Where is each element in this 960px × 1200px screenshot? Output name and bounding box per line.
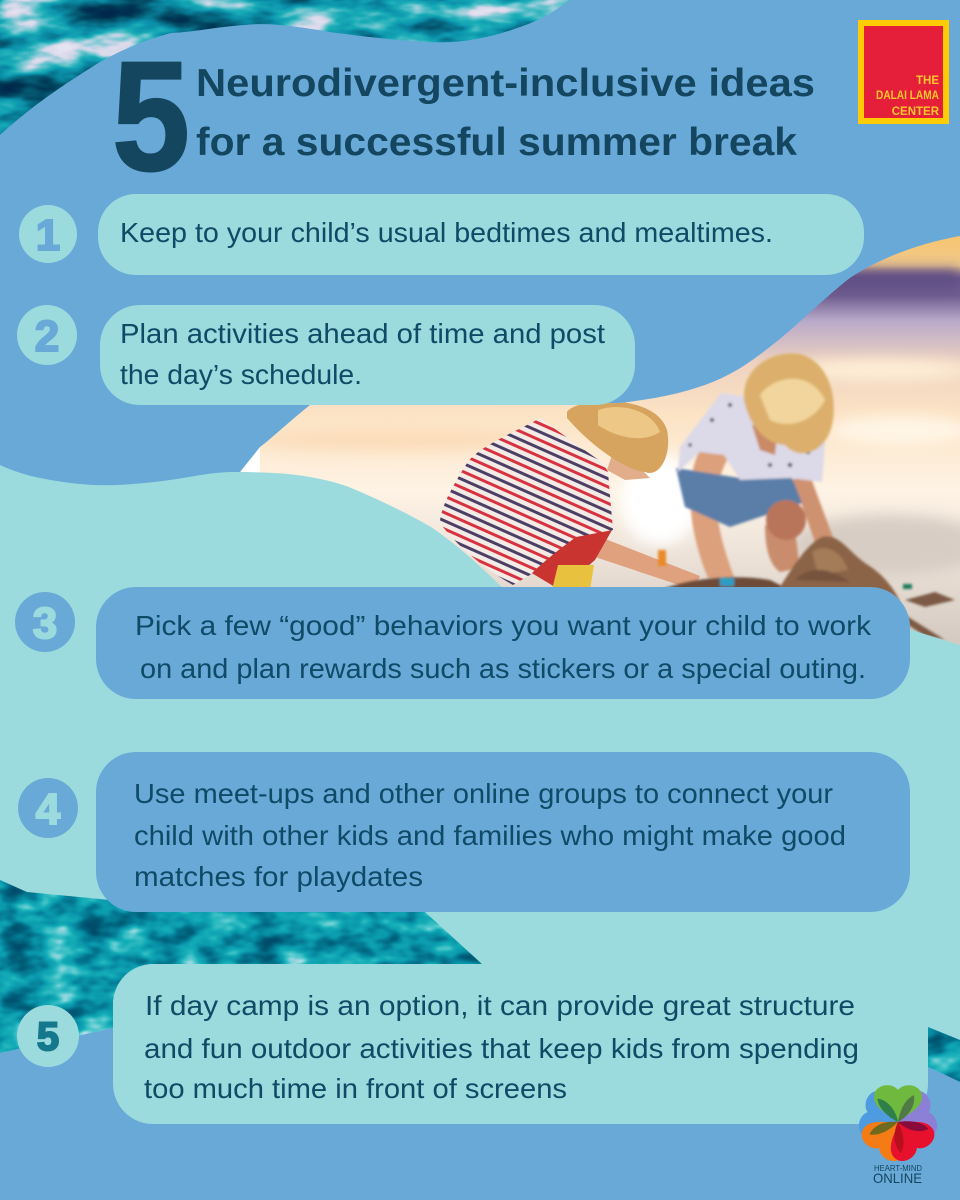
text 2: the day’s schedule. xyxy=(120,359,362,390)
white photo sliver xyxy=(240,447,260,476)
bubble 5 xyxy=(113,964,928,1124)
text 3: Pick a few “good” behaviors you want your child to work xyxy=(135,610,872,641)
teal wave xyxy=(0,465,960,1200)
step 3 xyxy=(15,587,910,699)
step 5 xyxy=(17,964,928,1124)
bubble 3 xyxy=(96,587,910,699)
logo: The Dalai Lama Center: DALAI LAMA xyxy=(876,90,939,102)
bubble 1 xyxy=(98,194,864,275)
number badge 4 xyxy=(18,778,78,838)
bubble 2 xyxy=(100,305,635,405)
number badge 2 xyxy=(17,305,77,365)
number badge 5 xyxy=(17,1005,79,1067)
logo wordmark: ONLINE xyxy=(873,1170,922,1186)
water texture top-left xyxy=(0,0,580,140)
logo: Heart-Mind Online xyxy=(856,1085,940,1186)
beach photo of two children xyxy=(250,236,960,660)
sand pile xyxy=(658,536,955,640)
text 3: on and plan rewards such as stickers or a special outing. xyxy=(140,653,866,684)
text 2 xyxy=(120,318,605,390)
number badge 1 xyxy=(19,205,77,263)
title xyxy=(112,30,815,204)
heading line 2: for a successful summer break xyxy=(196,121,797,164)
text 4: child with other kids and families who might make good xyxy=(134,820,846,851)
logo wordmark xyxy=(873,1163,922,1186)
big numeral 5: 5 xyxy=(112,30,190,204)
text 5: and fun outdoor activities that keep kids from spending xyxy=(144,1033,859,1064)
text 1: Keep to your child’s usual bedtimes and mealtimes. xyxy=(120,217,773,248)
text 4: matches for playdates xyxy=(134,861,423,892)
logo wordmark: HEART-MIND xyxy=(874,1163,922,1173)
water texture bottom xyxy=(0,875,960,1090)
number badge 5: 5 xyxy=(37,1015,59,1059)
number badge 3: 3 xyxy=(33,599,57,648)
left child xyxy=(440,401,700,590)
number badge 2: 2 xyxy=(35,312,59,361)
number badge 1: 1 xyxy=(36,211,60,260)
text 3 xyxy=(135,610,872,684)
text 5: too much time in front of screens xyxy=(144,1073,567,1104)
logo: The Dalai Lama Center xyxy=(858,20,949,124)
text 2: Plan activities ahead of time and post xyxy=(120,318,605,349)
step 2 xyxy=(17,305,635,405)
text 4: Use meet-ups and other online groups to connect your xyxy=(134,778,833,809)
logo: The Dalai Lama Center: THE xyxy=(916,75,939,87)
number badge 3 xyxy=(15,592,75,652)
step 1 xyxy=(19,194,864,275)
right child xyxy=(676,353,834,582)
icon: five hearts flower xyxy=(856,1085,940,1166)
number badge 4: 4 xyxy=(36,785,61,834)
text 4 xyxy=(134,778,846,892)
bubble 4 xyxy=(96,752,910,912)
heading line 1: Neurodivergent-inclusive ideas xyxy=(196,62,815,105)
step 4 xyxy=(18,752,910,912)
logo: The Dalai Lama Center: CENTER xyxy=(892,106,940,118)
text 5 xyxy=(144,990,859,1104)
blue bottom band xyxy=(0,1028,960,1200)
text 5: If day camp is an option, it can provide great structure xyxy=(145,990,855,1021)
